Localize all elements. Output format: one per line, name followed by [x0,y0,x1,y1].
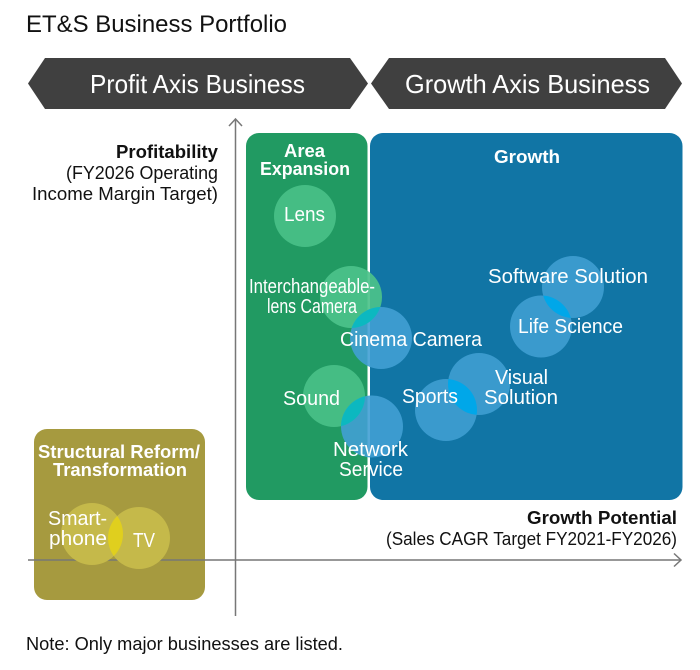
x axis arrow [28,554,681,566]
label: smartphone: phone [49,528,107,550]
bubble: cinema camera [350,307,412,369]
label: interchangeable-lens camera: Interchangeable- [249,276,375,298]
panel: structural reform / transformation [34,429,205,600]
overlap: sound and network [341,396,365,426]
footnote: Note: Only major businesses are listed. [26,634,343,654]
y axis label: profitability: (FY2026 Operating [66,163,218,183]
label: visual solution [484,367,558,409]
y axis arrow [229,119,242,616]
panel: area expansion [246,133,368,500]
label: network service: Network [333,439,409,461]
label: smartphone: Smart- [48,508,107,530]
bubble: smartphone [61,503,123,565]
bubble: sound [303,365,365,427]
banner: growth axis business: Growth Axis Business [405,69,650,99]
x axis label: growth potential: Growth Potential [527,508,677,528]
bubble labels [48,266,648,552]
x axis label: growth potential: (Sales CAGR Target FY2021-FY2026) [386,529,677,549]
bubble: visual solution [448,353,510,415]
overlap: interchangeable and cinema [352,307,380,328]
panel: area expansion: Expansion [260,158,350,179]
label: network service: Service [339,459,403,481]
label: interchangeable-lens camera [249,276,375,318]
bubble: tv [108,507,170,569]
bubble: sports [415,379,477,441]
label: tv: TV [133,530,156,552]
panel: structural reform / transformation: Structural Reform/ [38,441,200,462]
label: sports: Sports [402,386,458,408]
label: cinema camera: Cinema Camera [340,329,483,351]
label: visual solution: Visual [495,367,548,389]
y axis label: profitability: Income Margin Target) [32,184,218,204]
bubble: interchangeable-lens camera [320,266,382,328]
bubble: life science [510,296,572,358]
label: network service [333,439,409,481]
label: visual solution: Solution [484,387,558,409]
title: ET&S Business Portfolio [26,11,287,38]
banner: profit axis business [28,58,368,109]
y axis label: profitability [32,142,218,204]
panel: growth: Growth [494,146,560,167]
label: software solution: Software Solution [488,266,648,288]
label: sound: Sound [283,388,340,410]
bubble: lens [274,185,336,247]
banner: profit axis business: Profit Axis Business [90,69,305,99]
overlap: sports and visual [448,379,477,415]
y axis label: profitability: Profitability [116,142,218,162]
x axis label: growth potential [386,508,677,549]
bubble: lens: Lens [284,204,325,226]
panel: structural reform / transformation: Transformation [53,459,187,480]
label: interchangeable-lens camera: lens Camera [267,296,358,318]
bubble: network service [341,396,403,458]
panel: area expansion: Area [284,140,326,161]
overlap: smartphone and tv [108,516,123,556]
label: life science: Life Science [518,316,623,338]
overlap: software and life science [543,296,571,318]
banner: growth axis business [371,58,682,109]
label: smartphone [48,508,107,550]
panel: growth [370,133,682,500]
bubble: software solution [542,256,604,318]
